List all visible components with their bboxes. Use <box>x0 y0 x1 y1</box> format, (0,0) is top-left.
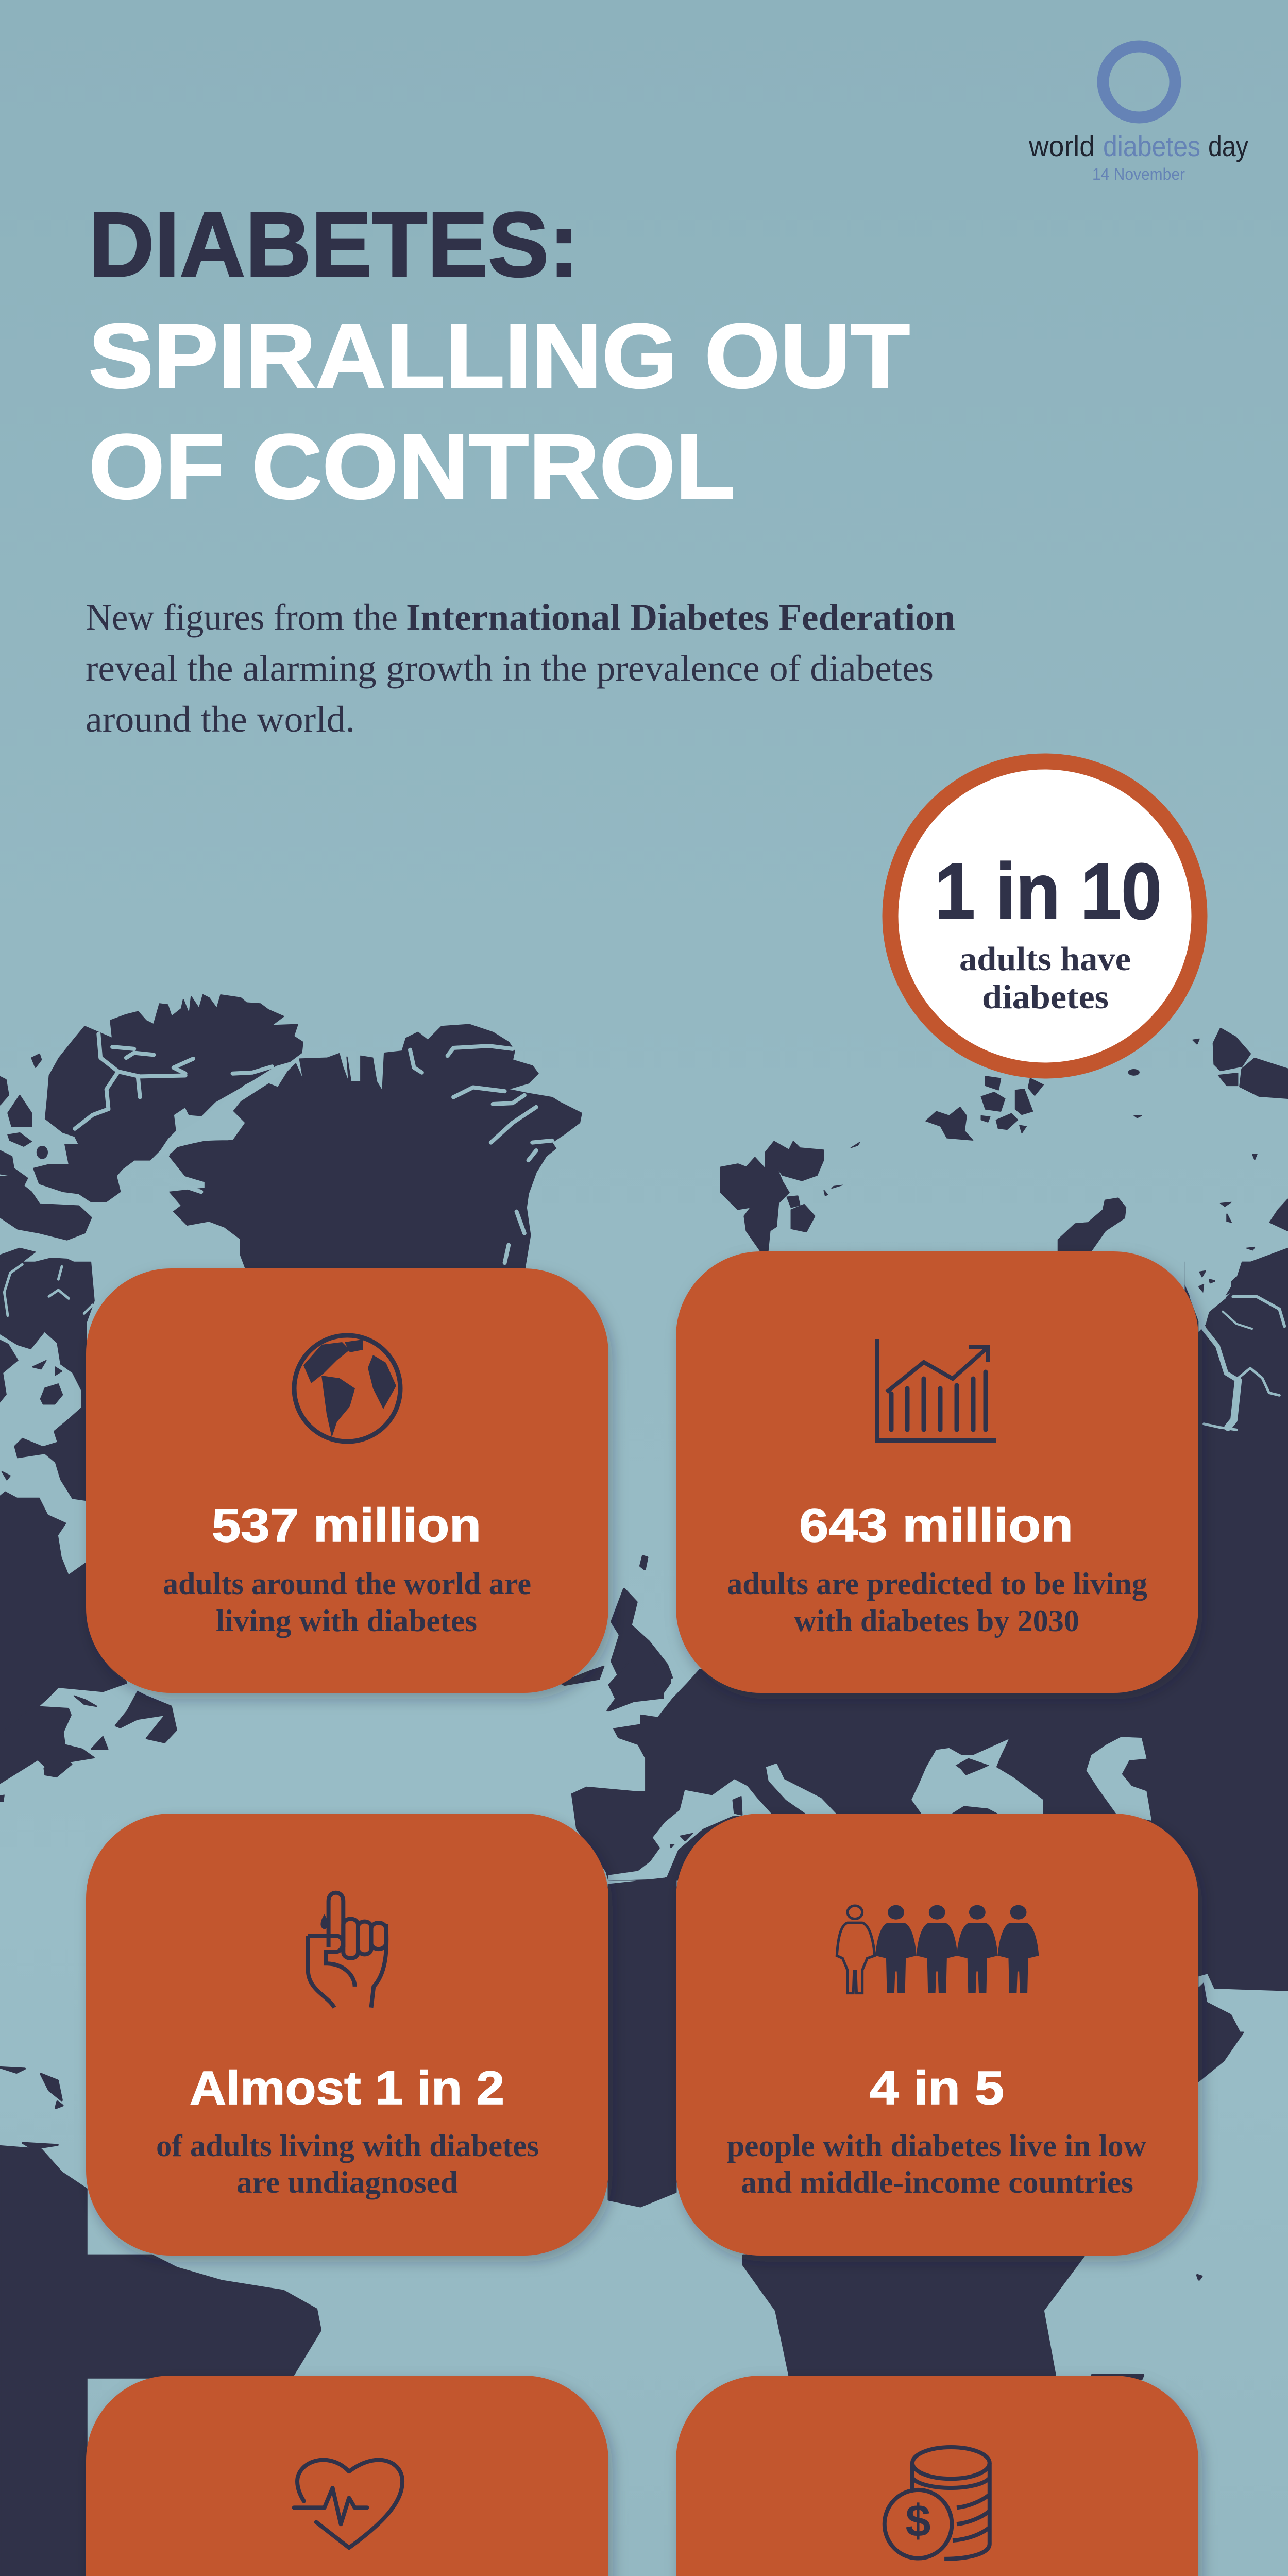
title: SPIRALLING OUT <box>89 304 910 407</box>
icon: rising chart <box>877 1339 996 1440</box>
panel: 537 million: living with diabetes <box>216 1604 477 1638</box>
icon: globe <box>294 1335 400 1442</box>
callout: 1 in 10 adults have diabetes: diabetes <box>982 978 1109 1016</box>
icon: hand with finger-prick drop <box>308 1893 386 2008</box>
logo: world diabetes day: 14 November <box>1092 165 1185 183</box>
panel: 966 billion USD <box>676 2376 1198 2576</box>
panel: 537 million <box>86 1268 608 1693</box>
icon: coin stack with dollar: $ <box>906 2495 930 2546</box>
panel: almost 1 in 2: are undiagnosed <box>236 2165 458 2199</box>
logo: world diabetes day: world <box>1028 130 1095 162</box>
intro text: International Diabetes Federation <box>406 597 955 638</box>
title: DIABETES: <box>89 193 579 296</box>
panel: almost 1 in 2: of adults living with diabetes <box>156 2129 539 2163</box>
panel: 643 million <box>676 1251 1198 1693</box>
panel: almost 1 in 2: Almost 1 in 2 <box>190 2062 504 2114</box>
intro text: reveal the alarming growth in the prevalence of diabetes <box>86 648 934 689</box>
africa <box>608 1875 676 2207</box>
panel: 4 in 5: and middle-income countries <box>741 2165 1133 2199</box>
logo: world diabetes day: day <box>1208 130 1248 162</box>
panel: 643 million: adults are predicted to be living <box>727 1567 1147 1601</box>
panel: 537 million: adults around the world are <box>163 1567 531 1601</box>
callout: 1 in 10 adults have diabetes: 1 in 10 <box>935 847 1162 936</box>
icon: heart with pulse <box>294 2460 402 2548</box>
intro text: New figures from the <box>86 597 398 638</box>
callout: 1 in 10 adults have diabetes <box>890 761 1199 1071</box>
title: OF CONTROL <box>89 415 735 518</box>
panel: 4 in 5: 4 in 5 <box>870 2062 1004 2114</box>
intro text <box>86 597 955 740</box>
logo: world diabetes day: diabetes <box>1103 130 1200 162</box>
panel: 4 in 5 <box>676 1814 1198 2256</box>
icon: blue circle <box>1103 46 1175 117</box>
world map <box>0 995 1288 2576</box>
panel: 537 million: 537 million <box>212 1499 481 1552</box>
callout: 1 in 10 adults have diabetes: adults have <box>959 940 1131 978</box>
icon: five people holding hands <box>837 1905 1039 1993</box>
logo: world diabetes day <box>1028 46 1248 183</box>
intro text: around the world. <box>86 699 355 740</box>
panel: 6.7 million <box>86 2376 608 2576</box>
icon: coin stack with dollar <box>885 2447 990 2559</box>
panel: 643 million: with diabetes by 2030 <box>794 1604 1079 1638</box>
panel: almost 1 in 2 <box>86 1814 608 2256</box>
panel: 4 in 5: people with diabetes live in low <box>727 2129 1147 2163</box>
title <box>89 193 910 518</box>
panel: 643 million: 643 million <box>799 1499 1073 1552</box>
